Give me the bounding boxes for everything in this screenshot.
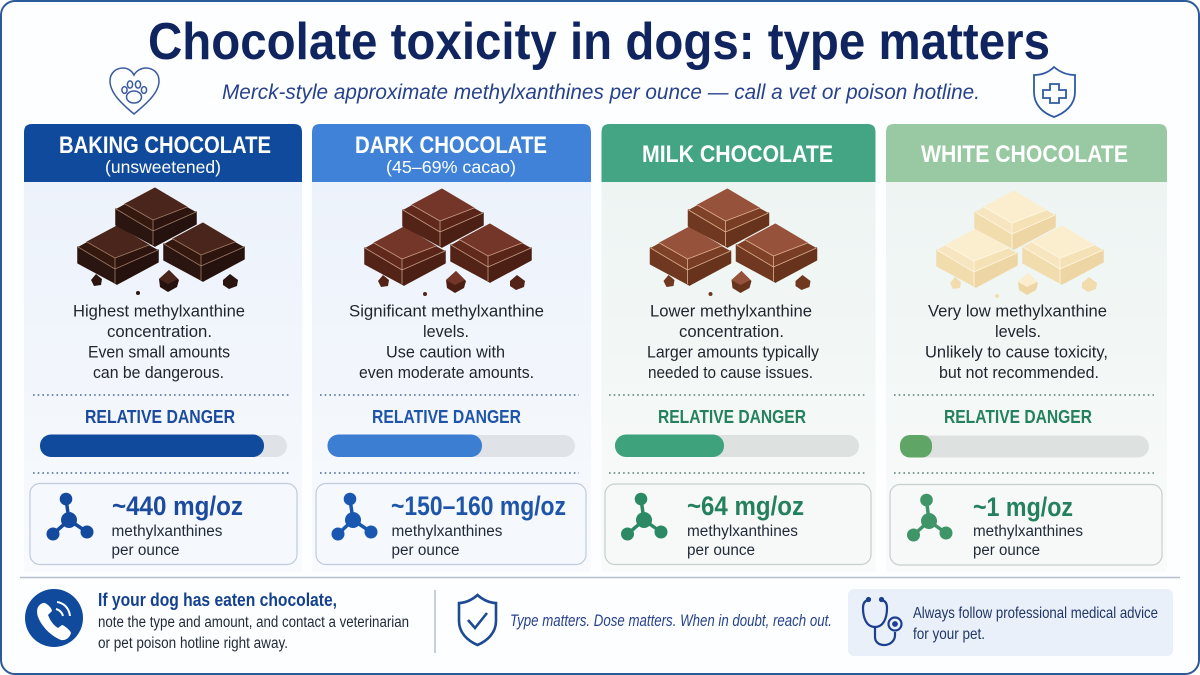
icon: stethoscope xyxy=(863,598,902,645)
callout: medical advice xyxy=(848,589,1173,656)
relative danger label: RELATIVE DANGER xyxy=(658,407,806,427)
description: Highest methylxanthine xyxy=(73,302,245,320)
value: ~1 mg/oz xyxy=(973,492,1073,522)
value: ~150–160 mg/oz xyxy=(391,491,566,521)
callout: if your dog has eaten chocolate: or pet poison hotline right away. xyxy=(98,635,288,652)
unit: methylxanthines xyxy=(392,523,503,540)
unit xyxy=(687,523,798,559)
icon: heart with paw xyxy=(110,68,159,114)
description: can be dangerous. xyxy=(93,364,224,382)
description: Unlikely to cause toxicity, xyxy=(925,344,1108,362)
icon: shield with check xyxy=(459,595,496,645)
icon: molecule xyxy=(621,493,668,540)
description: Significant methylxanthine xyxy=(349,302,544,320)
description: Larger amounts typically xyxy=(647,344,820,362)
icon: molecule xyxy=(907,494,952,542)
card body xyxy=(602,170,876,572)
relative danger label: RELATIVE DANGER xyxy=(85,407,235,427)
value: ~64 mg/oz xyxy=(687,491,804,521)
description: levels. xyxy=(995,323,1041,341)
description: Lower methylxanthine xyxy=(650,302,812,320)
danger bar xyxy=(900,435,1149,458)
description: needed to cause issues. xyxy=(648,364,813,382)
advice text xyxy=(913,605,1158,643)
header title: DARK CHOCOLATE xyxy=(355,132,547,159)
callout: if your dog has eaten chocolate: note the type and amount, and contact a veterinarian xyxy=(98,614,409,631)
description: but not recommended. xyxy=(939,364,1099,382)
unit: methylxanthines xyxy=(112,523,223,540)
header xyxy=(886,124,1167,182)
danger bar xyxy=(328,434,575,457)
title: Chocolate toxicity in dogs: type matters xyxy=(148,13,1050,71)
chocolate illustration xyxy=(937,191,1103,298)
callout: if your dog has eaten chocolate: If your dog has eaten chocolate, xyxy=(98,590,337,610)
unit: per ounce xyxy=(392,542,460,559)
unit xyxy=(973,523,1083,559)
subtitle: Merck-style approximate methylxanthines per ounce — call a vet or poison hotline. xyxy=(222,81,980,104)
relative danger label: RELATIVE DANGER xyxy=(944,407,1092,427)
icon: shield with cross xyxy=(1034,67,1075,117)
description xyxy=(925,302,1108,382)
description xyxy=(349,302,544,382)
header xyxy=(602,124,876,182)
unit: per ounce xyxy=(112,542,180,559)
icon: molecule xyxy=(332,493,378,540)
unit: per ounce xyxy=(973,542,1040,559)
header xyxy=(24,124,302,182)
description: even moderate amounts. xyxy=(359,364,534,382)
danger bar xyxy=(40,434,287,457)
header subtitle: (unsweetened) xyxy=(105,157,221,177)
tagline: Type matters. Dose matters. When in doubt, reach out. xyxy=(510,611,832,630)
icon: molecule xyxy=(46,493,94,540)
card body xyxy=(312,170,591,572)
header subtitle: (45–69% cacao) xyxy=(386,157,516,177)
icon: phone xyxy=(25,589,83,647)
description: concentration. xyxy=(107,323,212,341)
panel: dark chocolate xyxy=(312,124,591,572)
panel: white chocolate xyxy=(886,124,1167,572)
value box xyxy=(605,484,871,564)
danger bar xyxy=(615,434,859,457)
advice text: for your pet. xyxy=(913,626,985,643)
unit xyxy=(112,523,223,559)
callout: if your dog has eaten chocolate xyxy=(98,590,409,652)
unit: methylxanthines xyxy=(973,523,1083,540)
chocolate illustration xyxy=(365,189,531,296)
value: ~440 mg/oz xyxy=(112,491,243,521)
unit: per ounce xyxy=(687,542,755,559)
description: levels. xyxy=(423,323,469,341)
description xyxy=(73,302,245,382)
description: Very low methylxanthine xyxy=(928,302,1107,320)
card body xyxy=(24,170,302,572)
description xyxy=(647,302,820,382)
header title: BAKING CHOCOLATE xyxy=(59,132,271,159)
header xyxy=(312,124,591,182)
chocolate illustration xyxy=(78,188,244,295)
header title: MILK CHOCOLATE xyxy=(642,141,833,168)
panel: milk chocolate xyxy=(602,124,876,572)
value box xyxy=(890,484,1162,565)
unit xyxy=(392,523,503,559)
relative danger label: RELATIVE DANGER xyxy=(372,407,521,427)
value box xyxy=(30,484,297,564)
description: Use caution with xyxy=(386,344,505,362)
panel: baking chocolate xyxy=(24,124,302,572)
value box xyxy=(316,484,586,564)
header title: WHITE CHOCOLATE xyxy=(921,141,1128,168)
chocolate illustration xyxy=(650,189,816,296)
description: concentration. xyxy=(679,323,784,341)
unit: methylxanthines xyxy=(687,523,798,540)
description: Even small amounts xyxy=(88,344,230,362)
card body xyxy=(886,170,1167,572)
